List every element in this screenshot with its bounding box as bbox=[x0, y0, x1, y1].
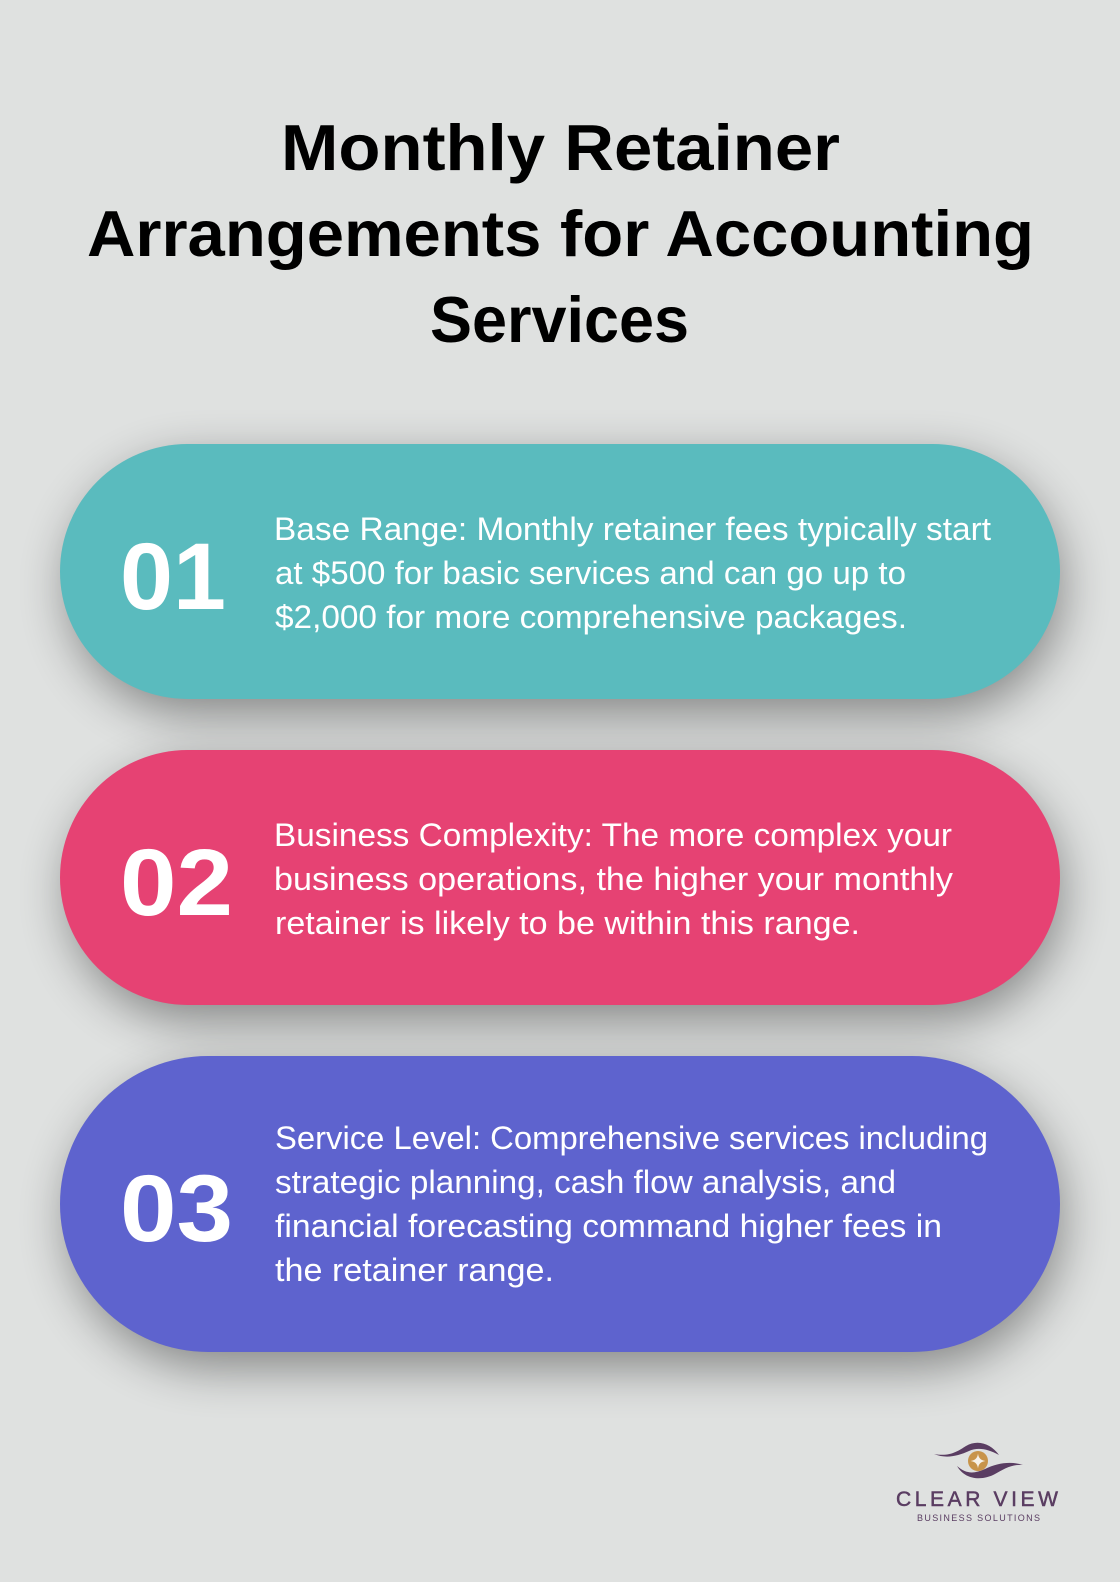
title: Arrangements for Accounting bbox=[87, 197, 1034, 270]
panel: service level bbox=[60, 1056, 1062, 1368]
title bbox=[87, 111, 1034, 356]
text: service level: Service Level: Comprehensive services including bbox=[275, 1120, 988, 1156]
logo wordmark: CLEAR VIEW bbox=[896, 1488, 1058, 1511]
title: Monthly Retainer bbox=[281, 111, 840, 184]
number 01: 01 bbox=[120, 524, 226, 630]
number 03: 03 bbox=[120, 1156, 233, 1262]
text: business complexity: retainer is likely to be within this range. bbox=[275, 905, 860, 941]
title: Services bbox=[430, 283, 689, 356]
logo tagline: BUSINESS SOLUTIONS bbox=[917, 1513, 1040, 1523]
text: service level: strategic planning, cash flow analysis, and bbox=[275, 1164, 896, 1200]
text: business complexity: business operations, the higher your monthly bbox=[274, 861, 954, 897]
panel: business complexity bbox=[60, 750, 1062, 1021]
logo: Clear View Business Solutions bbox=[896, 1443, 1058, 1523]
text: base range bbox=[274, 511, 991, 635]
text: base range: at $500 for basic services and can go up to bbox=[275, 555, 906, 591]
text: service level: financial forecasting command higher fees in bbox=[275, 1208, 942, 1244]
number 02: 02 bbox=[120, 830, 233, 936]
text: business complexity: Business Complexity: The more complex your bbox=[274, 817, 952, 853]
text: business complexity bbox=[274, 817, 954, 941]
icon: eye bbox=[934, 1443, 1023, 1478]
text: base range: Base Range: Monthly retainer fees typically start bbox=[274, 511, 991, 547]
text: service level bbox=[275, 1120, 988, 1288]
text: base range: $2,000 for more comprehensive packages. bbox=[275, 599, 907, 635]
panel: base range bbox=[60, 444, 1062, 715]
text: service level: the retainer range. bbox=[275, 1252, 554, 1288]
